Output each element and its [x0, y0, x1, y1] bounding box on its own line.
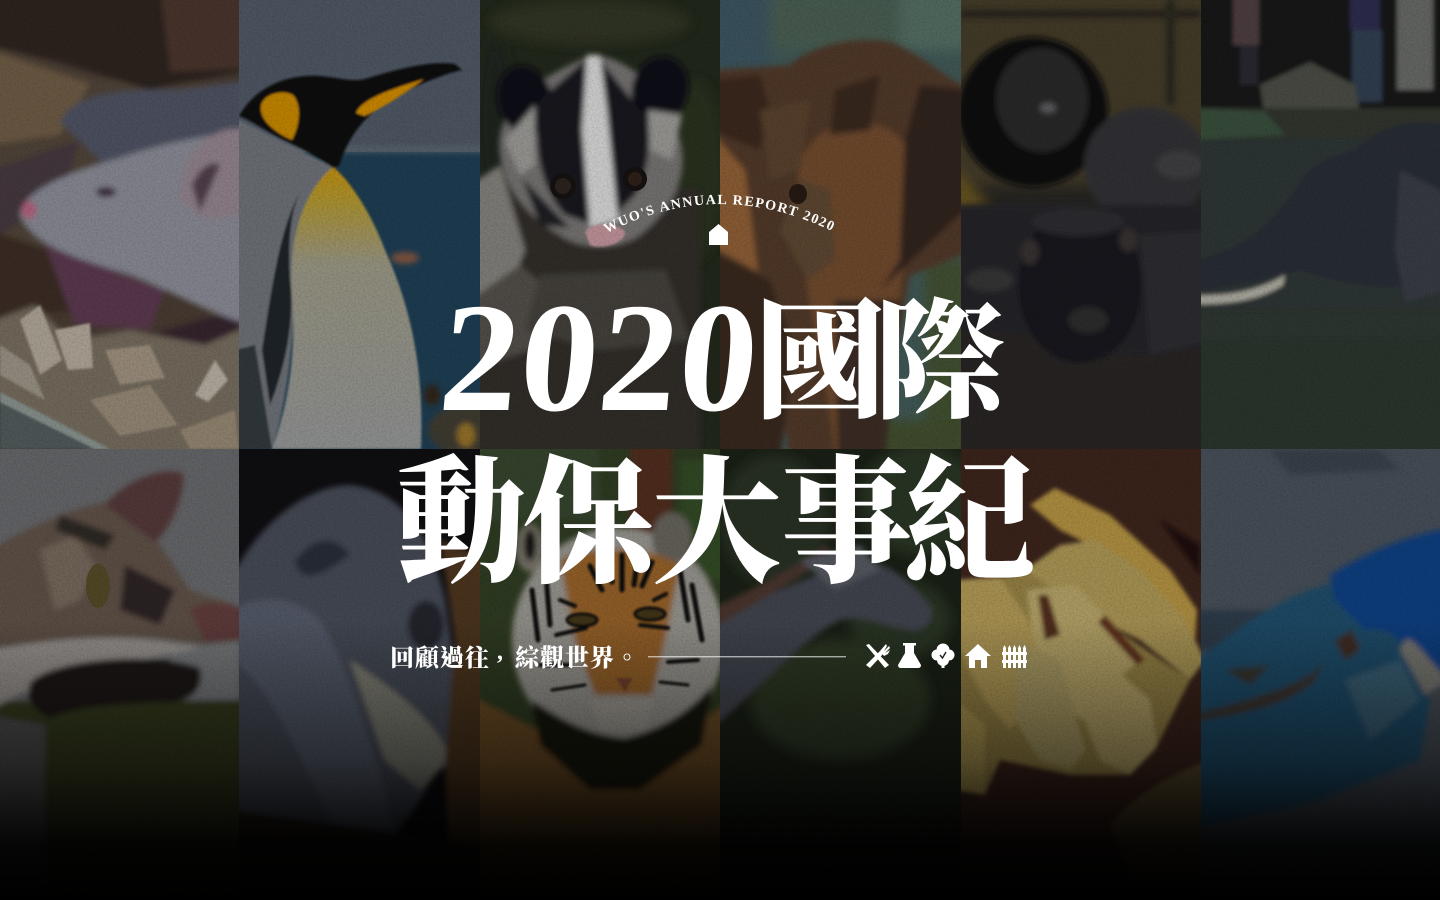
- panel: food photo: [961, 449, 1201, 840]
- panel: donkey photo: [720, 449, 961, 812]
- panel: mouse photo: [0, 0, 250, 460]
- title line one: 國際: [755, 292, 1013, 436]
- divider line: [648, 656, 846, 657]
- icon: house: [965, 644, 991, 668]
- panel: koala photo: [239, 449, 480, 838]
- panel: cat photo: [0, 449, 239, 838]
- subtitle: 回顧過往,綜觀世界。: [390, 639, 639, 672]
- title line two: 動保大事紀: [396, 449, 1035, 601]
- title year: 2020: [434, 271, 765, 444]
- panel: tiger photo: [480, 449, 720, 844]
- panel: mask photo: [1201, 449, 1440, 840]
- arched caption: WUO'S ANNUAL REPORT 2020: [602, 194, 834, 232]
- title: [396, 271, 1035, 601]
- panel: mink photo: [961, 0, 1201, 449]
- panel: river elephant photo: [1190, 0, 1440, 460]
- icon: fence: [1002, 645, 1027, 668]
- icon: flask: [898, 643, 921, 668]
- icon: tree with check: [932, 644, 954, 668]
- icon: fork and knife: [866, 644, 890, 668]
- panel: penguin photo: [239, 0, 480, 449]
- panel: elephant photo: [720, 0, 961, 449]
- panel: civet photo: [470, 0, 725, 460]
- icon row: [866, 643, 1027, 668]
- icon: home badge: [709, 224, 728, 245]
- bottom fade: [0, 620, 1440, 900]
